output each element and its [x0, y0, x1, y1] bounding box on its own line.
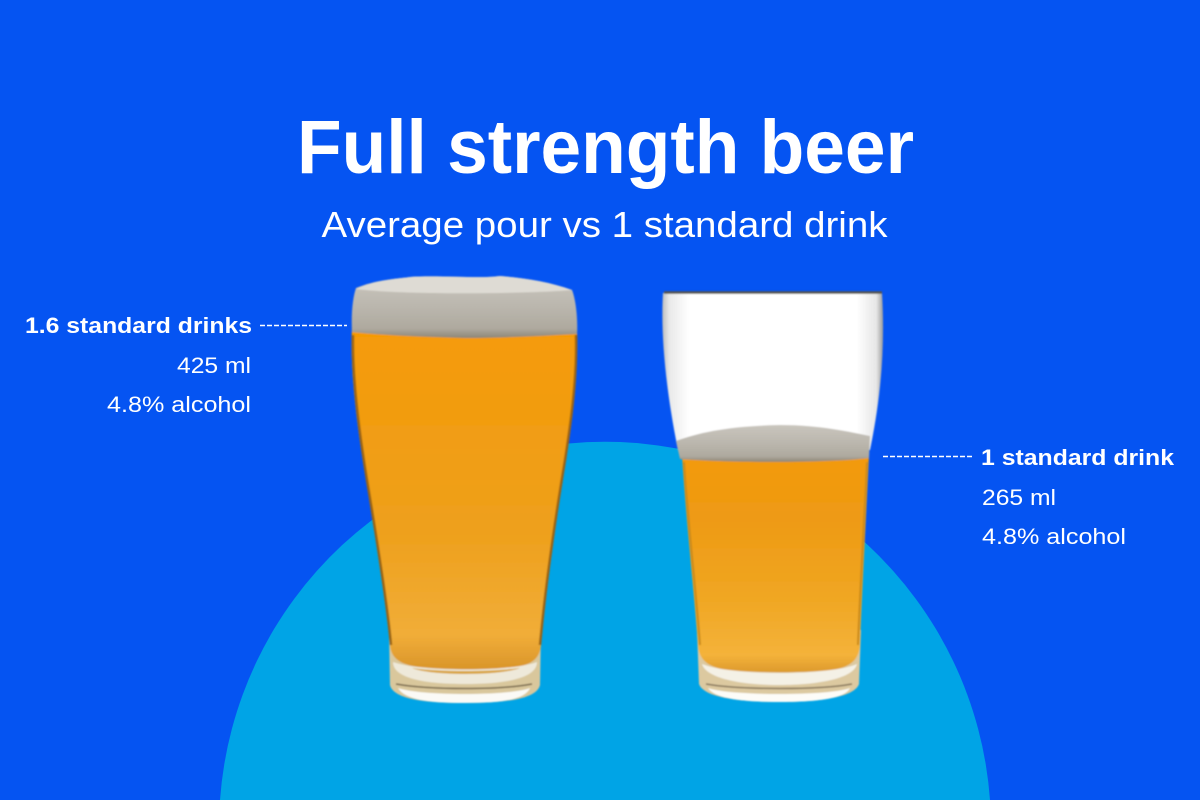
base highlight upper	[393, 662, 537, 684]
left leader line	[260, 324, 347, 326]
empty glass portion	[662, 293, 883, 450]
left heading: 1.6 standard drinks	[25, 313, 252, 338]
right leader line	[883, 456, 972, 458]
beer body	[682, 455, 869, 672]
base highlight lower	[398, 688, 530, 703]
left volume: 425 ml	[177, 353, 251, 378]
glass base	[389, 630, 541, 703]
beer edges	[684, 462, 867, 645]
foam top	[356, 276, 572, 293]
left glass edge	[353, 335, 391, 645]
full pour glass	[352, 276, 577, 703]
right alcohol: 4.8% alcohol	[982, 524, 1126, 549]
average glass	[662, 292, 883, 702]
foam head	[352, 276, 577, 338]
beer reflection in base	[412, 668, 520, 674]
glass rim	[664, 291, 882, 294]
subtitle: Average pour vs 1 standard drink	[322, 204, 889, 245]
title: Full strength beer	[297, 105, 914, 190]
label: left glass	[25, 313, 347, 417]
left alcohol: 4.8% alcohol	[107, 392, 251, 417]
label: right glass	[883, 445, 1175, 549]
base highlight lower	[708, 688, 850, 702]
right glass edge	[540, 335, 576, 645]
foam head	[676, 425, 870, 462]
right heading: 1 standard drink	[981, 445, 1175, 470]
base highlight upper	[702, 664, 857, 685]
right volume: 265 ml	[982, 485, 1056, 510]
beer body	[352, 327, 577, 669]
background circle	[220, 442, 990, 800]
glass base	[697, 630, 861, 702]
